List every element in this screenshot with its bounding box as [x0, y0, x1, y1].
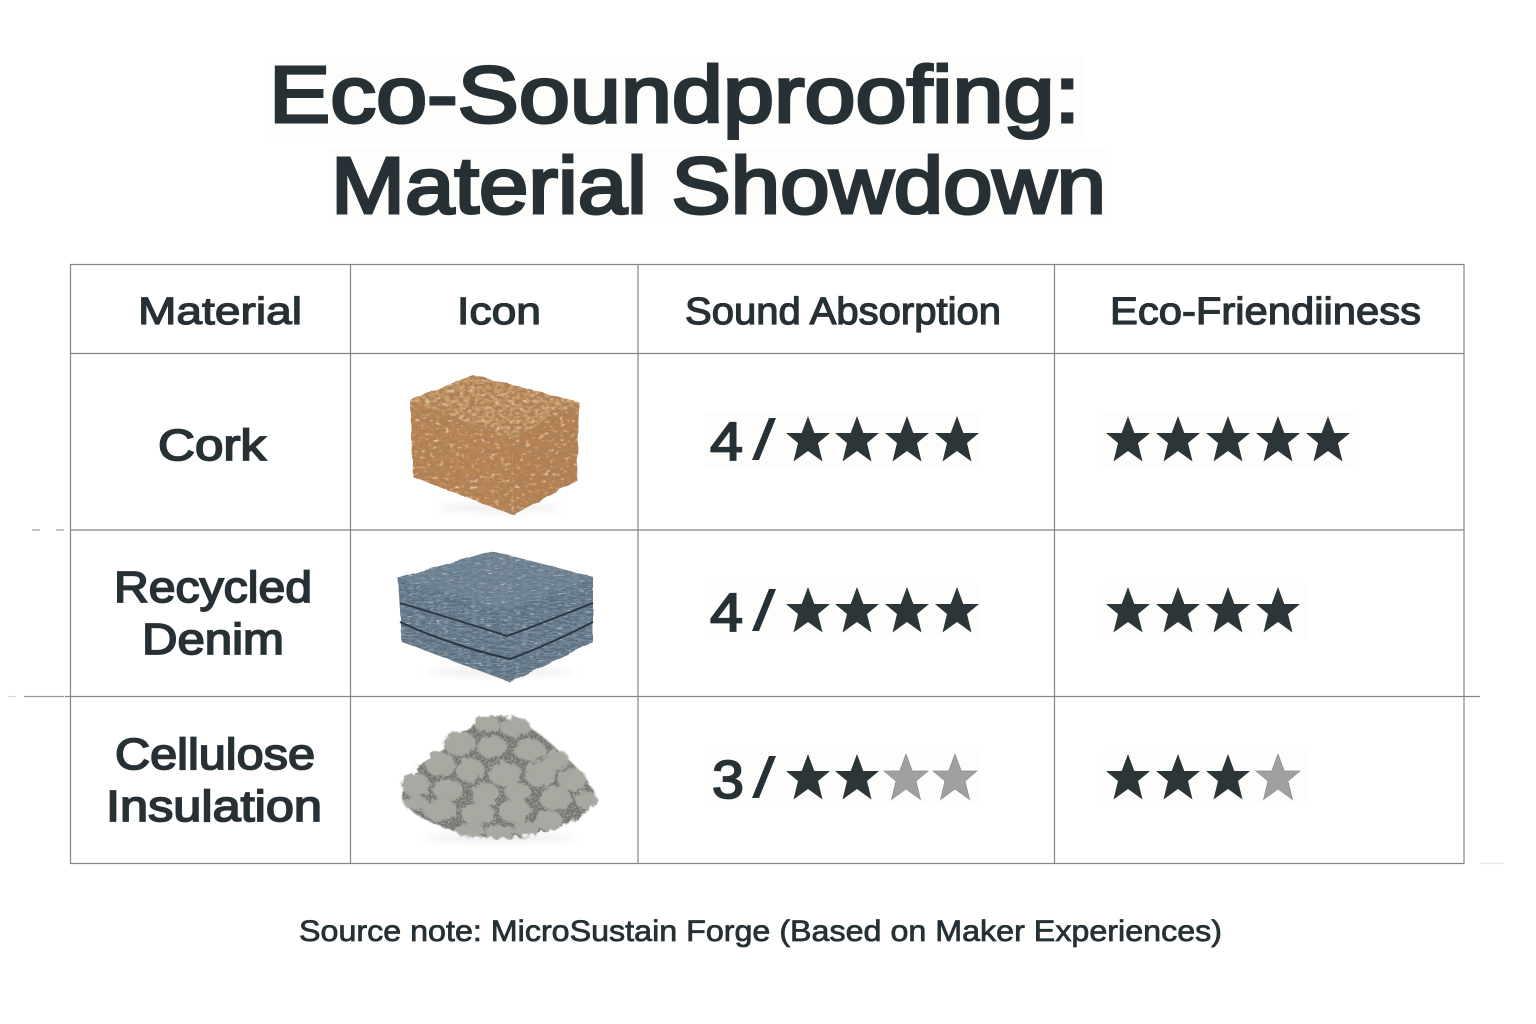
sound absorption rating: Denim 4: 4	[710, 583, 743, 643]
title: Eco-Soundproofing:	[269, 50, 1080, 139]
eco-friendliness rating: Cork 5 stars	[1102, 412, 1358, 468]
source note: Source note: MicroSustain Forge (Based on Maker Experiences)	[299, 915, 1222, 948]
eco-friendliness rating: Cellulose 3 of 4 stars	[1102, 750, 1308, 806]
row label: Cellulose Insulation: Insulation	[106, 782, 322, 831]
comparison table grid	[8, 264, 1504, 864]
row label: Recycled Denim	[114, 563, 312, 664]
sound absorption rating: Cellulose 3	[704, 750, 980, 810]
row label: Cellulose Insulation	[106, 730, 322, 831]
eco-friendliness rating: Denim 4 stars	[1102, 583, 1308, 639]
table header row: Icon	[457, 291, 541, 333]
table header row: Material	[138, 291, 302, 333]
table header row: Eco-Friendiiness	[1110, 291, 1421, 333]
title: Material Showdown	[331, 141, 1106, 230]
row label: Recycled Denim: Recycled	[114, 563, 312, 612]
table header row: Sound Absorption	[685, 291, 1001, 333]
table header row	[138, 291, 1421, 333]
icon: cork block	[410, 375, 579, 515]
sound absorption rating: Cellulose 3: 3	[712, 750, 744, 810]
row label: Cork: Cork	[158, 421, 267, 470]
icon: cellulose mound	[402, 716, 597, 841]
sound absorption rating: Cork 4	[704, 412, 980, 472]
row label: Cellulose Insulation: Cellulose	[115, 730, 315, 779]
sound absorption rating: Cork 4: 4	[710, 412, 743, 472]
sound absorption rating: Denim 4	[704, 583, 980, 643]
title	[266, 50, 1110, 230]
row label: Recycled Denim: Denim	[142, 615, 284, 664]
icon: recycled denim stack	[398, 551, 593, 682]
